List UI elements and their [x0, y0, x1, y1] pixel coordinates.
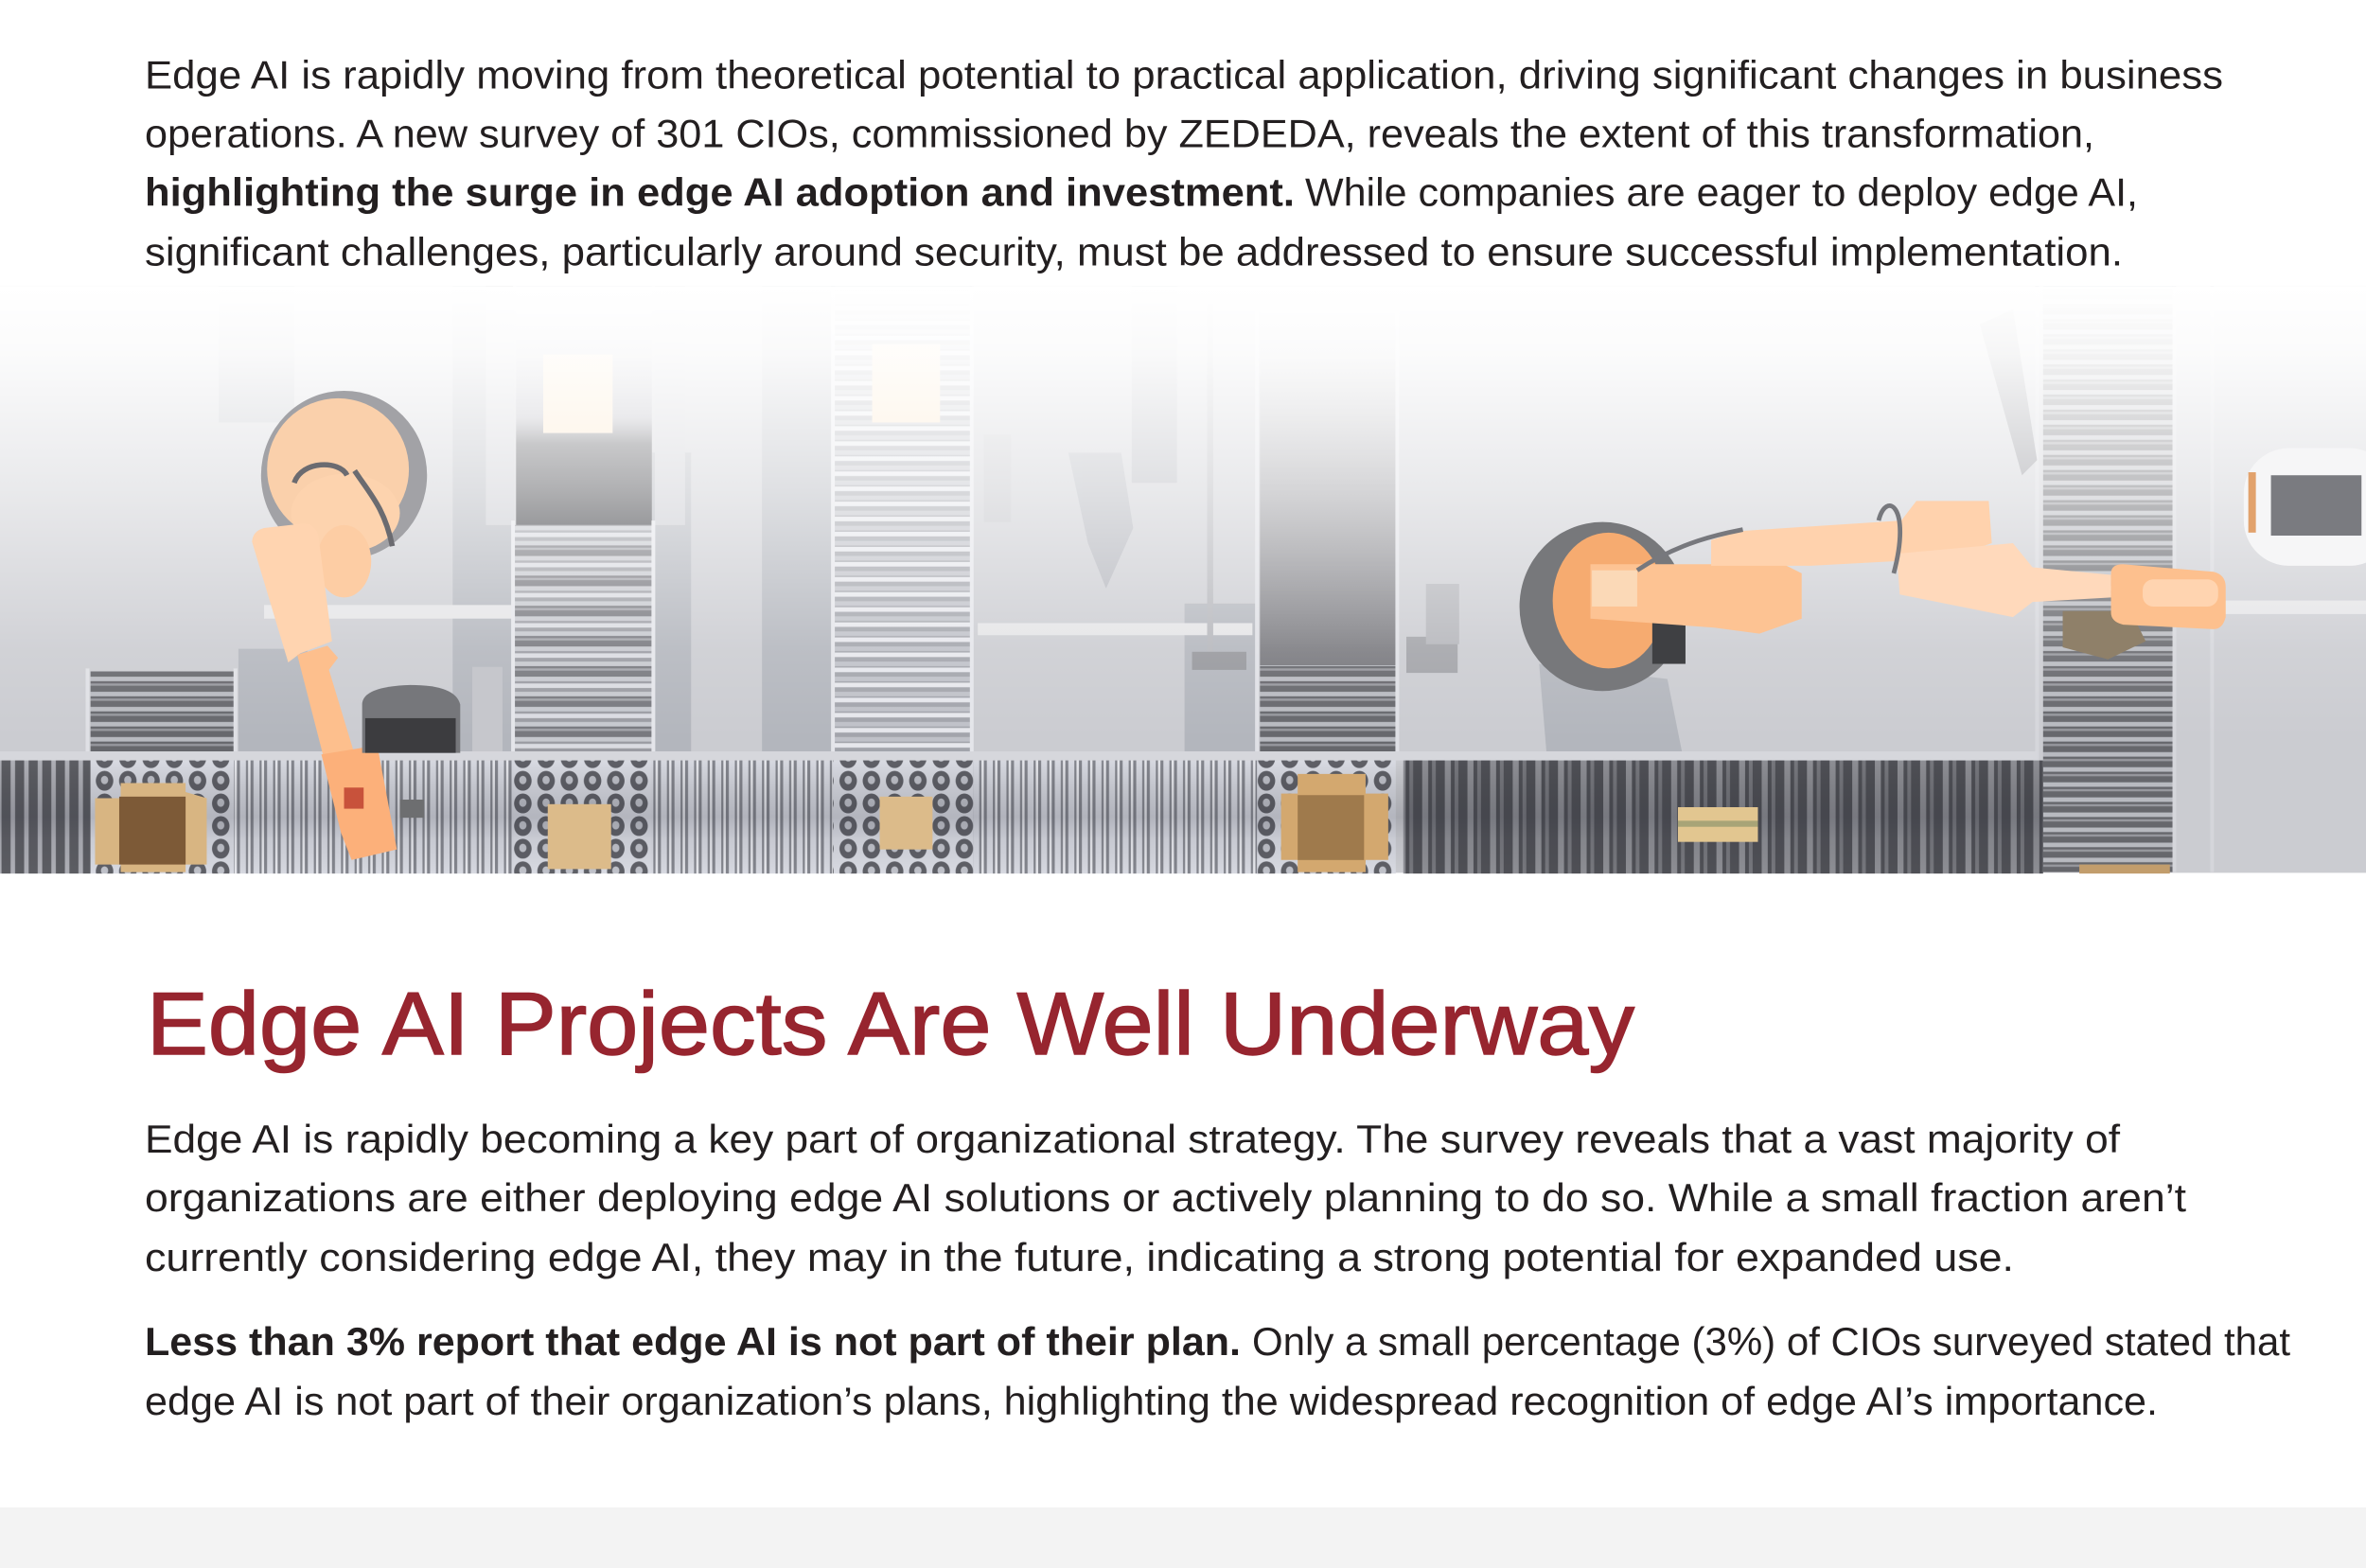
body paragraph: less than 3% — [145, 1319, 2290, 1423]
intro paragraph: operations. A new survey of 301 CIOs, commissioned by ZEDEDA, reveals the extent of this transformation, — [145, 112, 2094, 155]
robot arm: right — [1520, 501, 2226, 691]
body paragraph: strategy: currently considering edge AI, they may in the future, indicating a strong potential for expanded use. — [145, 1235, 2014, 1279]
body paragraph: strategy: Edge AI is rapidly becoming a key part of organizational strategy. The survey reveals that a vast majority of — [145, 1117, 2120, 1161]
vertical conveyor: centre rollers — [833, 287, 1011, 757]
vertical conveyor: dark belt — [1192, 302, 1459, 759]
body paragraph: less than 3%: edge AI is not part of their organization’s plans, highlighting the widespread recognition of edge AI’s importance. — [145, 1379, 2158, 1423]
body paragraph: less than 3%: Only a small percentage (3%) of CIOs surveyed stated that — [1252, 1319, 2290, 1364]
factory floor — [0, 287, 2366, 872]
floor shadows — [219, 287, 1683, 757]
mobile robot — [2244, 449, 2366, 566]
intro paragraph: highlighting the surge in edge AI adoption and investment. — [145, 170, 1295, 214]
fade to white — [0, 287, 2366, 739]
intro paragraph: Edge AI is rapidly moving from theoretical potential to practical application, driving significant changes in business — [145, 53, 2223, 97]
intro paragraph: significant challenges, particularly around security, must be addressed to ensure successful implementation. — [145, 229, 2123, 274]
robot arm: left — [252, 391, 427, 860]
machine unit — [362, 667, 503, 753]
cardboard boxes — [95, 774, 2170, 873]
heading: Edge AI Projects Are Well Underway — [147, 974, 1634, 1073]
floor markings — [264, 601, 2366, 635]
vertical conveyor: left belt — [486, 287, 685, 757]
footer band — [0, 1507, 2366, 1568]
intro paragraph — [145, 53, 2223, 274]
body paragraph: less than 3%: Less than 3% report that edge AI is not part of their plan. — [145, 1319, 1241, 1364]
body paragraph: strategy: organizations are either deploying edge AI solutions or actively planning to do so. While a small fraction aren’t — [145, 1175, 2186, 1220]
horizontal conveyor — [0, 751, 2043, 873]
vertical conveyor: far right — [1980, 287, 2212, 872]
intro paragraph: While companies are eager to deploy edge AI, — [1305, 170, 2138, 214]
body paragraph: strategy — [145, 1117, 2186, 1279]
short conveyor — [87, 668, 236, 759]
photo: robotic arms on a conveyor line — [0, 287, 2366, 873]
